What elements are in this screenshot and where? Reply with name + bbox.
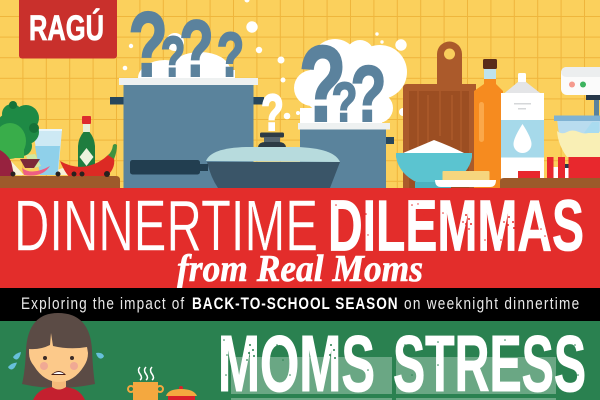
tagline: Exploring the impact of (21, 295, 185, 313)
heading: Moms Stress (218, 319, 586, 400)
question marks: large pot (128, 0, 244, 96)
steam cloud: large pot (138, 33, 235, 96)
icon: sweat drops (8, 352, 104, 370)
orange oil bottle (474, 59, 503, 188)
measuring cup of water (33, 129, 62, 175)
onion and vegetables (0, 150, 72, 176)
small white question mark: ? (261, 85, 284, 141)
question marks: right pot: ? (299, 23, 346, 144)
pan lid knob (258, 132, 286, 147)
frying pan (198, 147, 340, 188)
icon: red casserole (166, 386, 197, 400)
question marks: large pot: ? (161, 25, 185, 89)
red title band (0, 188, 600, 288)
stand mixer (547, 67, 600, 178)
kitchen bubbles (123, 0, 407, 119)
translucent stat boxes (231, 357, 556, 400)
tagline: BACK-TO-SCHOOL SEASON (192, 295, 398, 313)
tagline: on weeknight dinnertime (404, 295, 579, 313)
wooden board right (500, 178, 600, 188)
question marks: right pot: ? (351, 49, 386, 138)
steam cloud: right pot (294, 39, 407, 124)
question marks: large pot: ? (179, 3, 214, 93)
illustration: stressed mom (22, 313, 95, 400)
red chili pepper (60, 144, 117, 183)
butter on a plate (435, 171, 496, 187)
milk carton (501, 73, 544, 185)
hot sauce bottle (78, 116, 95, 168)
question marks: right pot: ? (332, 73, 357, 133)
green section background (0, 321, 600, 400)
broccoli (0, 101, 41, 169)
right pot (298, 123, 394, 188)
flour bowl (396, 140, 472, 188)
subtitle script: from Real Moms: from Real Moms (177, 248, 423, 290)
stock pot (110, 78, 264, 188)
logo: Ragu: RAGÚ (29, 8, 104, 48)
logo: Ragu (19, 0, 117, 58)
icon: orange soup pot (128, 367, 163, 400)
tiled kitchen wall background (0, 0, 600, 188)
tagline (21, 295, 579, 313)
question marks: right pot (299, 23, 386, 144)
black subtitle band (0, 288, 600, 321)
wooden board left (0, 171, 120, 188)
question marks: large pot: ? (217, 21, 244, 90)
cutting board (403, 41, 476, 188)
title: Dinnertime: DINNERTIME (14, 186, 318, 266)
